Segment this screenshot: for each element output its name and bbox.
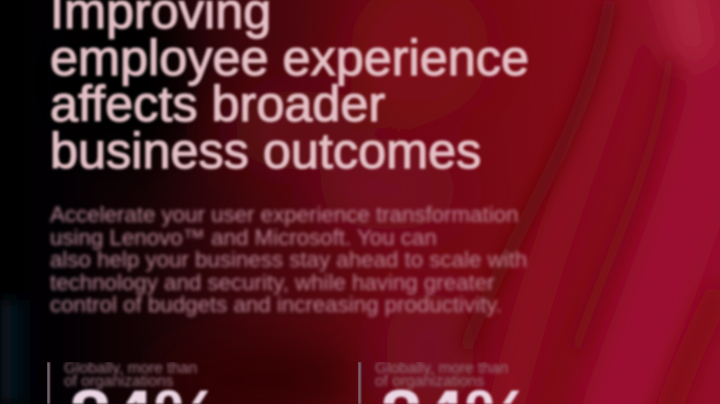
- stat: right: [358, 362, 532, 404]
- stat: left: of organizations: [64, 373, 173, 390]
- heading: employee experience: [50, 28, 529, 86]
- heading: affects broader: [50, 75, 385, 132]
- heading: [50, 0, 530, 178]
- body text: also help your business stay ahead to scale with: [50, 247, 527, 272]
- body text: Accelerate your user experience transformation: [50, 202, 518, 227]
- body text: [48, 202, 528, 319]
- body text: technology and security, while having greater: [50, 270, 495, 295]
- stat: left: [47, 362, 221, 404]
- heading: business outcomes: [50, 122, 481, 178]
- stat: right: of organizations: [375, 373, 484, 390]
- body text: using Lenovo™ and Microsoft. You can: [50, 225, 437, 250]
- body text: control of budgets and increasing productivity.: [50, 292, 502, 317]
